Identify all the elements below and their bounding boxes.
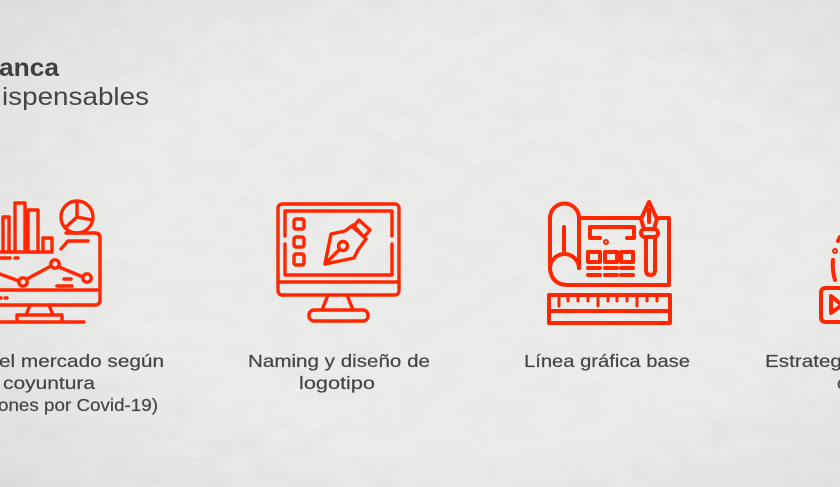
label: market [0, 351, 164, 415]
label: market: el mercado según [0, 351, 164, 371]
label: logo [248, 351, 430, 393]
icon: logo design monitor [278, 204, 399, 321]
icon: video strategy [821, 237, 840, 322]
icon: market analysis monitor [0, 201, 100, 322]
label: strategy [765, 351, 840, 393]
label: market: coyuntura [3, 373, 95, 393]
label: market: ones por Covid-19) [0, 395, 158, 415]
label: graphic line: Línea gráfica base [524, 351, 690, 371]
heading: anca [0, 54, 60, 82]
label: logo: logotipo [299, 373, 375, 393]
icon: brand stationery and tools [549, 202, 670, 323]
label: logo: Naming y diseño de [248, 351, 430, 371]
heading [0, 54, 149, 111]
heading: ispensables [2, 83, 149, 111]
